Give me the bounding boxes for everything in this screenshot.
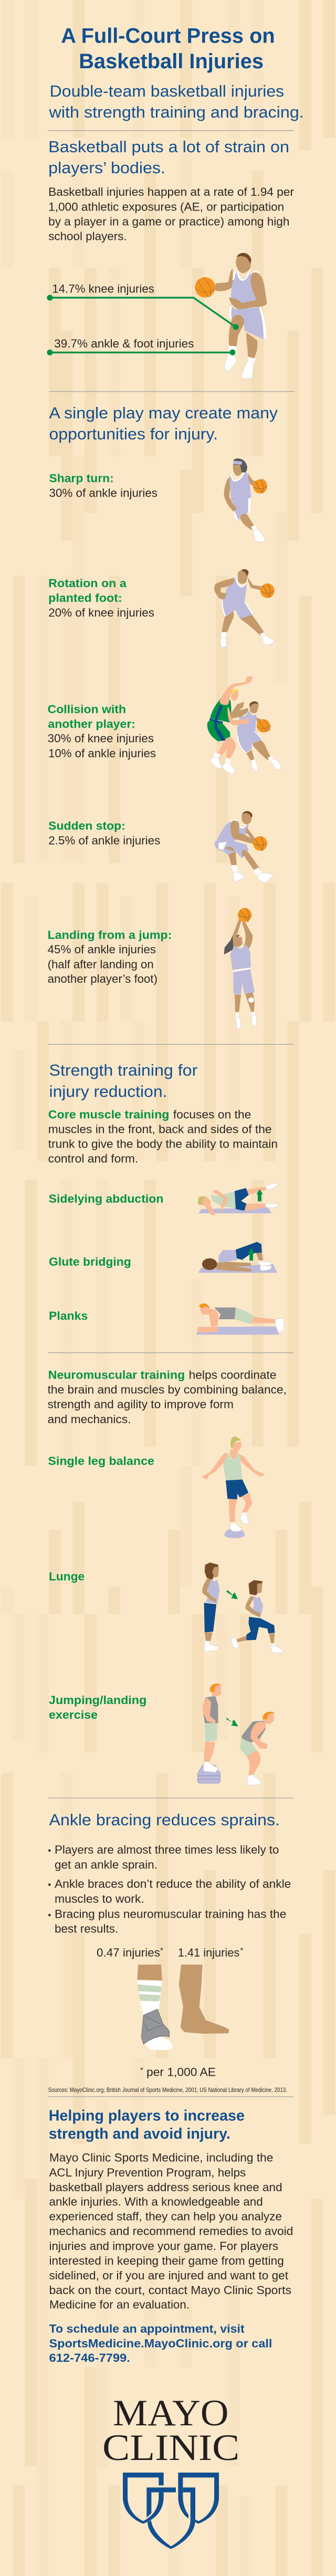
- subtitle: Double-team basketball injuries: [50, 82, 284, 100]
- stat: braced injuries: *: [160, 1946, 163, 1955]
- text block: collision: Collision with: [48, 702, 126, 716]
- heading: strain: Basketball puts a lot of strain on: [48, 138, 289, 156]
- text block: sharp turn: [49, 472, 158, 499]
- text block: collision: 10% of ankle injuries: [48, 746, 156, 760]
- text block: landing: [48, 928, 172, 985]
- label: sidelying abduction: Sidelying abduction: [49, 1192, 163, 1205]
- label: planks: Planks: [49, 1309, 88, 1322]
- illustration: glute bridging: [198, 1242, 277, 1273]
- text block: neuromuscular training: strength and agility to improve form: [48, 1398, 234, 1411]
- text block: Mayo Clinic Sports Medicine: mechanics and recommend remedies to avoid: [49, 2225, 293, 2238]
- list: bracing benefits: best results.: [55, 1922, 118, 1935]
- logo: Mayo Clinic: CLINIC: [102, 2427, 239, 2468]
- text block: rotation: [48, 577, 154, 619]
- text block: neuromuscular training: and mechanics.: [48, 1413, 131, 1426]
- text block: landing: Landing from a jump:: [48, 928, 172, 942]
- illustration: braced ankle: [137, 1964, 173, 2050]
- illustration: player sudden stop: [215, 811, 274, 883]
- text block: Mayo Clinic Sports Medicine: injuries and improve your game. For players: [49, 2239, 278, 2253]
- text block: injury rate: Basketball injuries happen at a rate of 1.94 per: [48, 185, 295, 198]
- chart callout: ankle and foot injuries: 39.7% ankle & foot injuries: [54, 337, 194, 350]
- heading: strain: players’ bodies.: [48, 159, 165, 177]
- logo: Mayo Clinic: [102, 2393, 239, 2549]
- text block: Mayo Clinic Sports Medicine: ankle injuries. With a knowledgeable and: [49, 2195, 263, 2208]
- panel: strain on players' bodies: [47, 138, 295, 378]
- illustration: sidelying abduction: [198, 1183, 278, 1215]
- heading: helping players: Helping players to increase: [49, 2107, 245, 2124]
- text block: injury rate: 1,000 athletic exposures (AE, or participation: [48, 200, 284, 213]
- chart callout: knee injuries: [47, 282, 239, 330]
- label: jumping/landing exercise: Jumping/landing: [49, 1694, 146, 1707]
- label: jumping/landing exercise: [49, 1694, 146, 1721]
- panel: single play: [48, 404, 281, 1029]
- chart callout: knee injuries: 14.7% knee injuries: [52, 282, 154, 295]
- stat: unbraced injuries: *: [240, 1946, 244, 1955]
- list: bracing benefits: Ankle braces don’t reduce the ability of ankle: [55, 1877, 291, 1890]
- label: jumping/landing exercise: exercise: [49, 1708, 98, 1721]
- illustration: two players colliding: [207, 676, 281, 774]
- sources: Sources: MayoClinic.org; British Journal of Sports Medicine, 2001; US National Library of Medicine, 2013.: [48, 2087, 287, 2094]
- title: A Full-Court Press on: [61, 24, 275, 47]
- heading: strength training: [49, 1061, 197, 1100]
- heading: strength training: injury reduction.: [49, 1082, 167, 1100]
- heading: ankle bracing: Ankle bracing reduces sprains.: [49, 1811, 280, 1829]
- title: [61, 24, 275, 73]
- heading: strength training: Strength training for: [49, 1061, 197, 1079]
- text block: rotation: 20% of knee injuries: [48, 606, 154, 619]
- text block: core muscle training: focuses on the: [173, 1108, 251, 1121]
- text block: sudden stop: [48, 819, 160, 847]
- label: lunge: Lunge: [49, 1570, 85, 1583]
- heading: single play: [49, 404, 278, 443]
- text block: landing: (half after landing on: [48, 958, 154, 971]
- footnote: per 1,000 AE: per 1,000 AE: [146, 2065, 216, 2079]
- heading: single play: opportunities for injury.: [49, 425, 218, 443]
- list: bracing benefits: Bracing plus neuromuscular training has the: [55, 1907, 286, 1920]
- call to action: To schedule an appointment, visit: [49, 2322, 245, 2335]
- title: Basketball Injuries: [79, 50, 264, 73]
- text block: neuromuscular training: Neuromuscular training: [48, 1368, 185, 1381]
- text block: sudden stop: Sudden stop:: [48, 819, 125, 832]
- text block: Mayo Clinic Sports Medicine: interested in keeping their game from getting: [49, 2254, 284, 2267]
- text block: Mayo Clinic Sports Medicine: basketball players address serious knee and: [49, 2181, 282, 2194]
- stat: braced injuries: 0.47 injuries: [97, 1946, 160, 1959]
- call to action: [49, 2322, 272, 2364]
- text block: core muscle training: [48, 1108, 278, 1165]
- text block: neuromuscular training: [48, 1368, 287, 1426]
- text block: core muscle training: control and form.: [48, 1152, 138, 1165]
- footnote: per 1,000 AE: *: [140, 2066, 143, 2075]
- text block: Mayo Clinic Sports Medicine: back on the court, contact Mayo Clinic Sports: [49, 2284, 291, 2297]
- panel: helping players: [49, 2107, 293, 2364]
- text block: sudden stop: 2.5% of ankle injuries: [48, 834, 160, 847]
- text block: Mayo Clinic Sports Medicine: Mayo Clinic Sports Medicine, including the: [49, 2151, 273, 2164]
- text block: sharp turn: Sharp turn:: [49, 472, 114, 485]
- list: bracing benefits: [48, 1843, 291, 1935]
- heading: strain: [48, 138, 289, 177]
- chart callout: ankle and foot injuries: [47, 337, 236, 355]
- text block: core muscle training: trunk to give the body the ability to maintain: [48, 1138, 278, 1151]
- panel: strength training: [48, 1061, 284, 1334]
- text block: sharp turn: 30% of ankle injuries: [49, 486, 158, 499]
- text block: rotation: Rotation on a: [48, 577, 127, 590]
- logo: Mayo Clinic: MAYO: [113, 2393, 229, 2434]
- list: bracing benefits: get an ankle sprain.: [55, 1858, 158, 1871]
- text block: core muscle training: Core muscle training: [48, 1108, 169, 1121]
- text block: landing: 45% of ankle injuries: [48, 943, 156, 956]
- illustration: player dribbling: [195, 253, 267, 378]
- call to action: 612-746-7799.: [49, 2351, 130, 2364]
- list: bracing benefits: muscles to work.: [55, 1892, 144, 1905]
- text block: core muscle training: muscles in the front, back and sides of the: [48, 1122, 272, 1136]
- panel: neuromuscular training: [48, 1368, 287, 1785]
- stat: unbraced injuries: 1.41 injuries: [178, 1946, 239, 1959]
- list: bracing benefits: Players are almost three times less likely to: [55, 1843, 279, 1856]
- text block: rotation: planted foot:: [48, 591, 122, 604]
- text block: Mayo Clinic Sports Medicine: experienced staff, they can help you analyze: [49, 2210, 282, 2223]
- text block: Mayo Clinic Sports Medicine: Medicine for an evaluation.: [49, 2298, 190, 2311]
- text block: neuromuscular training: the brain and muscles by combining balance,: [48, 1383, 287, 1396]
- illustration: planks: [196, 1303, 284, 1334]
- text block: neuromuscular training: helps coordinate: [189, 1368, 276, 1381]
- illustration: player landing: [224, 908, 257, 1029]
- text block: Mayo Clinic Sports Medicine: [49, 2151, 293, 2311]
- label: glute bridging: Glute bridging: [49, 1255, 131, 1268]
- text block: injury rate: school players.: [48, 230, 127, 243]
- icon: three shields: [123, 2473, 219, 2549]
- heading: helping players: [49, 2107, 245, 2142]
- illustration: lunge: [202, 1562, 284, 1653]
- illustration: jumping and landing: [197, 1684, 275, 1785]
- text block: injury rate: [48, 185, 295, 243]
- illustration: player sharp turn: [224, 458, 267, 542]
- label: single leg balance: Single leg balance: [48, 1455, 154, 1468]
- call to action: SportsMedicine.MayoClinic.org or call: [49, 2337, 272, 2350]
- illustration: player rotation: [214, 569, 275, 647]
- subtitle: with strength training and bracing.: [48, 103, 304, 121]
- text block: Mayo Clinic Sports Medicine: sidelined, or if you are injured and want to get: [49, 2269, 288, 2282]
- text block: collision: 30% of knee injuries: [48, 732, 154, 745]
- heading: helping players: strength and avoid injury.: [49, 2126, 230, 2142]
- text block: Mayo Clinic Sports Medicine: ACL Injury Prevention Program, helps: [49, 2166, 246, 2179]
- text block: collision: [48, 702, 156, 760]
- text block: landing: another player’s foot): [48, 972, 158, 985]
- text block: injury rate: by a player in a game or practice) among high: [48, 215, 289, 228]
- illustration: single leg balance: [201, 1436, 265, 1538]
- heading: single play: A single play may create many: [49, 404, 278, 422]
- subtitle: [48, 82, 304, 121]
- illustration: bare ankle: [179, 1964, 229, 2034]
- text block: collision: another player:: [48, 717, 135, 730]
- panel: ankle bracing: [48, 1811, 291, 2094]
